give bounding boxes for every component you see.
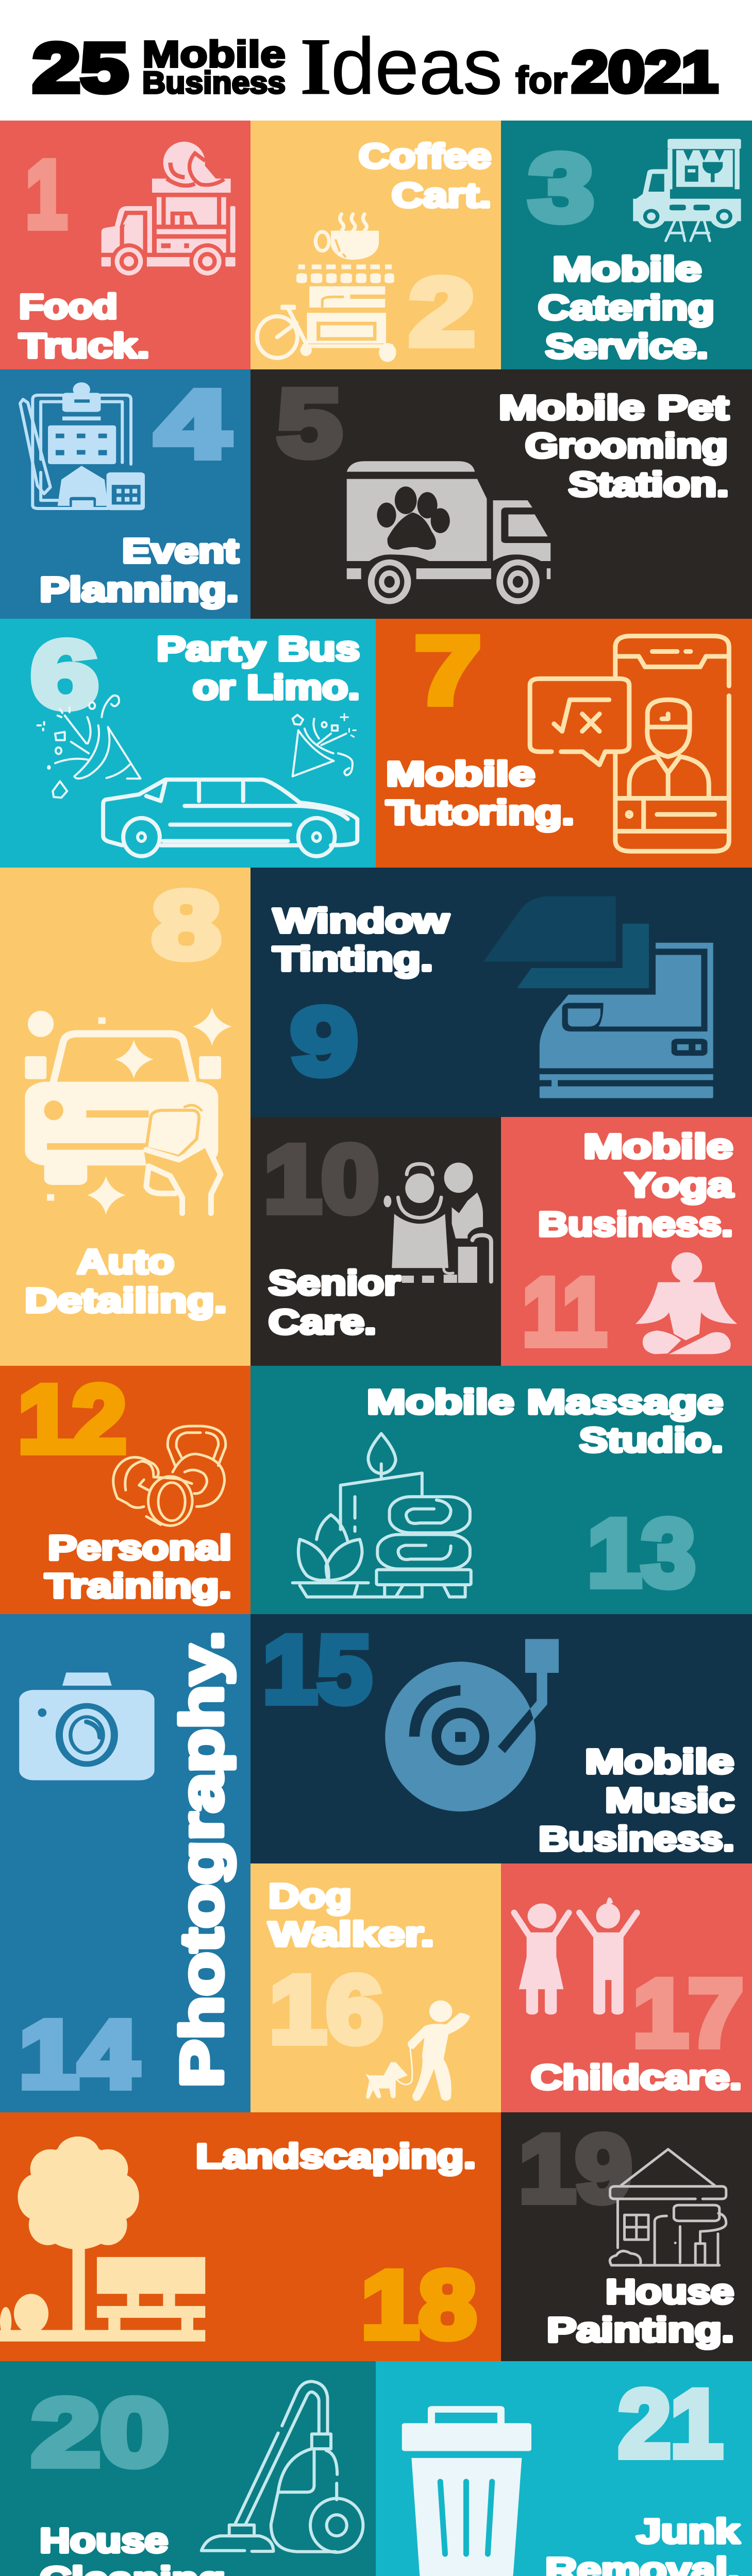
icon: vacuum cleaner	[202, 2381, 363, 2552]
label: Yoga	[625, 1166, 733, 1205]
panel: 15 mobile music	[250, 1614, 752, 1863]
label: Care.	[269, 1303, 376, 1342]
label	[45, 1529, 231, 1605]
panel: 19 house painting	[501, 2112, 752, 2361]
label: Auto	[77, 1243, 174, 1281]
icon: car door with tint film	[483, 896, 713, 1098]
icon: shining car and hand	[25, 1008, 231, 1214]
number 17: 17	[633, 1960, 743, 2066]
label: Station.	[569, 465, 729, 504]
label: Music	[605, 1781, 734, 1820]
number 11: 11	[523, 1259, 607, 1365]
label: Grooming	[525, 427, 728, 465]
label: Business.	[538, 1205, 733, 1244]
label: Mobile	[583, 1127, 733, 1166]
number 19: 19	[519, 2116, 632, 2222]
icon: tree and bench	[0, 2137, 205, 2342]
number 1: 1	[26, 142, 67, 248]
number 15: 15	[263, 1617, 372, 1723]
title: I	[300, 22, 332, 112]
icon: pet grooming truck	[347, 461, 550, 604]
icon: camera	[19, 1672, 155, 1781]
label: Truck.	[19, 327, 149, 365]
label	[19, 287, 149, 365]
label: Planning.	[40, 570, 239, 609]
number 20: 20	[31, 2380, 169, 2486]
label: Mobile	[386, 755, 535, 793]
label	[545, 2512, 740, 2576]
label: Tinting.	[273, 940, 433, 978]
label: Tutoring.	[386, 793, 574, 832]
label	[386, 755, 574, 832]
label: Studio.	[579, 1421, 723, 1460]
label (rotated): Photography.	[169, 1631, 235, 2088]
label: Landscaping.	[196, 2137, 476, 2176]
label: Childcare.	[531, 2058, 742, 2097]
label: Coffee	[359, 137, 491, 176]
label	[538, 1127, 733, 1244]
panel: 11 mobile yoga	[501, 1117, 752, 1366]
label: Walker.	[269, 1915, 434, 1954]
panel: 4 event planning	[0, 369, 250, 619]
panel: 21 junk removal	[376, 2361, 752, 2576]
label	[539, 1742, 734, 1858]
title: 25	[32, 29, 128, 107]
number 6: 6	[31, 622, 98, 728]
label: Junk	[637, 2512, 740, 2551]
number 12: 12	[18, 1366, 126, 1472]
label: Party Bus	[157, 630, 360, 668]
icon: elderly couple	[383, 1163, 491, 1283]
title: Mobile	[142, 34, 286, 75]
label: Business.	[539, 1820, 734, 1858]
number 7: 7	[415, 618, 481, 724]
panel: 2 coffee cart	[250, 121, 501, 369]
label: Mobile Pet	[499, 388, 729, 427]
panel: 18 landscaping	[0, 2112, 501, 2361]
icon: two children	[514, 1897, 637, 2014]
icon: house and paint roller	[610, 2149, 726, 2265]
label: Food	[19, 287, 118, 326]
label: Service.	[545, 327, 708, 366]
label	[157, 630, 360, 707]
number 14: 14	[19, 2002, 138, 2108]
panel: 16 dog walker	[250, 1863, 501, 2112]
icon: food truck	[102, 141, 236, 279]
title	[32, 22, 718, 112]
label: Cart.	[392, 176, 491, 215]
panel: 9 window tinting	[250, 868, 752, 1117]
title: deas	[331, 22, 503, 111]
panel: 20 house cleaning	[0, 2361, 376, 2576]
number 18: 18	[361, 2252, 476, 2358]
label: Mobile Massage	[367, 1383, 723, 1421]
label: House	[606, 2273, 734, 2311]
panel: 7 mobile tutoring	[376, 618, 752, 868]
label: Senior	[269, 1264, 400, 1302]
label	[273, 902, 449, 978]
panel: 10 senior care	[250, 1117, 501, 1366]
panel: 14 photography	[0, 1614, 250, 2112]
title: 2021	[572, 40, 718, 104]
label: Mobile	[553, 250, 701, 289]
label: Painting.	[547, 2311, 734, 2349]
label	[269, 1264, 400, 1342]
icon: vinyl record	[385, 1639, 559, 1811]
number 5: 5	[277, 370, 342, 477]
number 4: 4	[156, 371, 229, 478]
label: Catering	[538, 289, 714, 327]
label	[359, 137, 491, 215]
label	[547, 2273, 734, 2349]
icon: limousine	[103, 779, 357, 856]
panel: 6 party bus or limo	[0, 619, 376, 868]
panel: 5 mobile pet grooming	[250, 369, 752, 619]
label: Event	[122, 532, 239, 570]
icon: catering truck	[633, 139, 741, 241]
number 13: 13	[588, 1500, 695, 1606]
panel: 8 auto detailing	[0, 868, 250, 1366]
icon: candle and towels	[293, 1434, 471, 1597]
label	[40, 532, 239, 609]
number 8: 8	[152, 872, 221, 978]
title: Business	[142, 65, 286, 100]
icon: trash can	[402, 2406, 531, 2576]
icon: yoga pose	[636, 1252, 737, 1354]
label: Detailing.	[25, 1281, 227, 1320]
label: Window	[273, 902, 449, 940]
label	[269, 1877, 434, 1954]
label	[25, 1243, 227, 1320]
number 3: 3	[529, 135, 594, 241]
panel: 13 mobile massage	[250, 1366, 752, 1614]
icon: kettlebell and dumbbell	[113, 1426, 226, 1526]
panel: 12 personal training	[0, 1366, 250, 1614]
label	[40, 2521, 238, 2576]
icon: phone tutor	[530, 636, 729, 851]
panel: 17 childcare	[501, 1863, 752, 2112]
panel: 1 food truck	[0, 121, 250, 369]
icon: party popper right	[293, 714, 356, 776]
number 10: 10	[264, 1126, 379, 1232]
label: House	[40, 2521, 168, 2560]
icon: clipboard planner	[20, 382, 145, 510]
title: for	[515, 59, 567, 101]
label: Dog	[269, 1877, 352, 1916]
number 16: 16	[270, 1957, 383, 2063]
icon: coffee cart	[257, 214, 396, 362]
label	[538, 250, 714, 366]
label: Personal	[48, 1529, 231, 1567]
label: or Limo.	[193, 668, 360, 707]
number 2: 2	[409, 259, 475, 365]
label: Mobile	[585, 1742, 734, 1781]
label: Training.	[45, 1567, 231, 1605]
label	[367, 1383, 723, 1460]
panel: 3 mobile catering	[501, 121, 752, 369]
number 9: 9	[291, 989, 358, 1095]
icon: party popper left	[38, 696, 141, 798]
icon: person walking dog	[365, 2001, 470, 2101]
number 21: 21	[619, 2371, 723, 2477]
label	[499, 388, 729, 504]
